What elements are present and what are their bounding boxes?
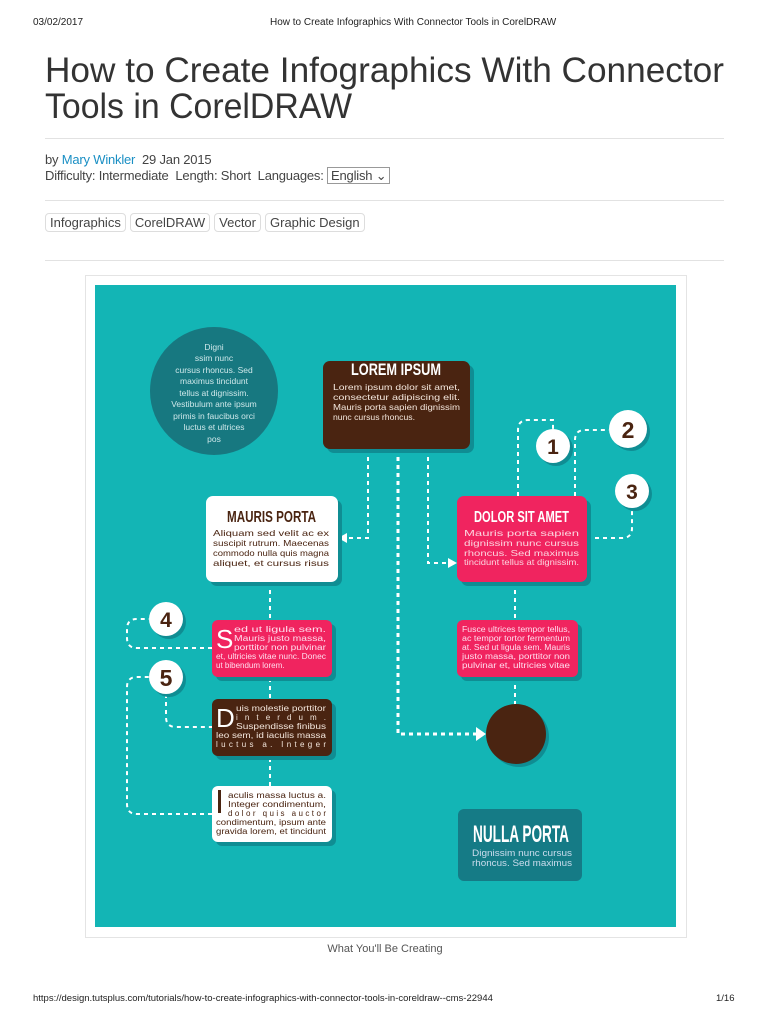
tags [45,213,365,232]
tags: Graphic Design [270,215,360,230]
meta info: Difficulty: Intermediate Length: Short Languages: English ⌄ [45,168,386,183]
box: S pink: et, ultricies vitae nunc. Donec [216,652,326,661]
box: mauris porta: aliquet, et cursus risus [213,558,329,568]
box: dolor sit amet: Mauris porta sapien [464,528,579,538]
box: S pink: porttitor non pulvinar [234,643,326,652]
circle: dark teal text: ssim nunc [195,353,234,363]
box: lorem ipsum: Mauris porta sapien dignissim [333,402,460,412]
box: mauris porta [206,496,342,586]
number circles 1-5 [149,410,652,697]
number circles 1-5: 2 [622,417,634,443]
box: pink right: Fusce ultrices tempor tellus, [462,625,570,634]
circle: dark teal text: cursus rhoncus. Sed [175,365,253,375]
circle: dark teal text: luctus et ultrices [184,422,244,432]
circle: dark teal text: primis in faucibus orci [173,411,255,421]
box: mauris porta: commodo nulla quis magna [213,548,329,558]
box: S pink: S [216,624,233,654]
box: D brown: leo sem, id iaculis massa [216,731,327,740]
box: dolor sit amet: DOLOR SIT AMET [474,509,569,526]
circle: dark teal text: pos [207,434,221,444]
header page title: How to Create Infographics With Connector Tools in CorelDRAW [270,17,556,28]
box: S pink: ut bibendum lorem. [216,661,284,670]
circle: dark teal text: tellus at dignissim. [179,388,249,398]
box: nulla porta: NULLA PORTA [473,821,569,848]
box: nulla porta: Dignissim nunc cursus [472,848,573,858]
box: dolor sit amet: dignissim nunc cursus [464,538,579,548]
box: I white: Integer condimentum, [228,800,326,809]
box: D brown: D [216,703,235,733]
box: S pink: Mauris justo massa, [234,634,326,643]
box: lorem ipsum: nunc cursus rhoncus. [333,412,415,422]
box: mauris porta: MAURIS PORTA [227,509,316,526]
box: pink right: at. Sed ut ligula sem. Mauris [462,643,570,652]
box: mauris porta: suscipit rutrum. Maecenas [213,538,329,548]
box: nulla porta [458,809,582,881]
image frame [85,275,687,938]
title [45,51,724,126]
box: I white: condimentum, ipsum ante [216,818,327,827]
box: lorem ipsum: Lorem ipsum dolor sit amet, [333,382,460,392]
box: D brown: interdum. [236,713,326,722]
box: S pink [212,620,336,681]
box: D brown [212,699,336,760]
tags: CorelDRAW [135,215,205,230]
tags: Vector [219,215,256,230]
circle: dark teal text: Digni [204,342,224,352]
box: I white: gravida lorem, et tincidunt [216,827,327,836]
circle: dark teal text: maximus tincidunt [180,376,249,386]
byline: by Mary Winkler 29 Jan 2015 [45,152,211,167]
box: D brown: Suspendisse finibus [236,722,326,731]
box: D brown: uis molestie porttitor [236,704,326,713]
title: Tools in CorelDRAW [45,87,352,126]
header date: 03/02/2017 [33,17,83,28]
circle: dark teal text: Vestibulum ante ipsum [171,399,257,409]
box: lorem ipsum [323,360,474,453]
footer page number: 1/16 [716,993,734,1004]
box: D brown: luctus a. Integer [216,740,326,749]
box: I white: dolor quis auctor [228,809,326,818]
circle: dark teal text [150,327,278,455]
box: mauris porta: Aliquam sed velit ac ex [213,528,330,538]
title: How to Create Infographics With Connector [45,51,724,90]
box: pink right [457,620,582,681]
box: pink right: ac tempor tortor fermentum [462,634,570,643]
footer url: https://design.tutsplus.com/tutorials/how-to-create-infographics-with-connector-tools-in-coreldraw--cms-22944 [33,993,493,1004]
number circles 1-5: 3 [626,481,638,504]
caption: What You'll Be Creating [327,943,443,955]
box: nulla porta: rhoncus. Sed maximus [472,858,573,868]
box: dolor sit amet: tincidunt tellus at dignissim. [464,557,579,567]
number circles 1-5: 4 [160,609,172,632]
number circles 1-5: 5 [160,665,173,691]
box: I white: aculis massa luctus a. [228,791,326,800]
box: dolor sit amet: rhoncus. Sed maximus [464,548,579,558]
brown circle [486,704,549,767]
box: I white [212,786,336,846]
box: dolor sit amet [457,496,591,586]
box: lorem ipsum: consectetur adipiscing elit. [333,392,460,402]
box: pink right: justo massa, porttitor non [461,652,570,661]
infographic panel [95,285,676,927]
number circles 1-5: 1 [547,436,559,459]
box: S pink: ed ut ligula sem. [234,625,326,634]
tags: Infographics [50,215,121,230]
box: pink right: pulvinar et, ultricies vitae [462,661,571,670]
box: lorem ipsum: LOREM IPSUM [351,360,441,379]
